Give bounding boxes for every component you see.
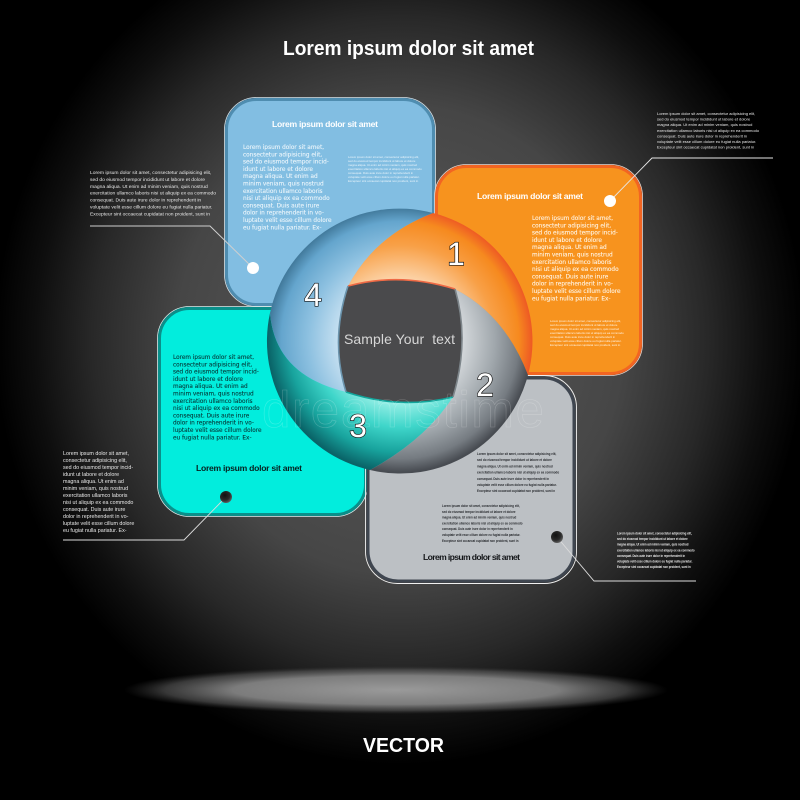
callout text: consequat. Duis aute irure dolor in reprehenderit in <box>657 133 747 138</box>
panel: orange card <box>434 164 642 376</box>
floor spotlight <box>124 666 668 714</box>
grey card upper text: magna aliqua. Ut enim ad minim veniam, quis nostrud <box>477 464 553 468</box>
blue card small text: exercitation ullamco laboris nisi ut aliquip ex ea commodo <box>348 167 422 171</box>
orange card body text: eu fugiat nulla pariatur. Ex- <box>532 296 611 302</box>
number 2: 2 <box>476 367 494 403</box>
orange card body text: consectetur adipisicing elit, <box>532 223 611 229</box>
orange card small text: Lorem ipsum dolor sit amet, consectetur adipisicing elit, <box>550 319 621 323</box>
grey card shape <box>366 376 576 584</box>
callout text: Lorem ipsum dolor sit amet, consectetur adipisicing elit, <box>657 111 755 116</box>
orange card body text: magna aliqua. Ut enim ad <box>532 245 607 251</box>
callout text: Lorem ipsum dolor sit amet, consectetur adipisicing elit, <box>90 170 211 176</box>
orange card body text: consequat. Duis aute irure <box>532 274 609 280</box>
teal card body text: luptate velit esse cillum dolore <box>173 428 262 434</box>
blue card body text: luptate velit esse cillum dolore <box>243 218 332 224</box>
blue card small text: sed do eiusmod tempor incididunt ut labore et dolore <box>348 159 416 163</box>
center panel right edge <box>453 289 462 397</box>
grey card upper text: exercitation ullamco laboris nisi ut aliquip ex ea commodo <box>477 470 559 475</box>
blue card small text: Excepteur sint occaecat cupidatat non proident, sunt in <box>348 179 419 183</box>
segmented ring diagram <box>267 209 532 474</box>
grey card lower text: Excepteur sint occaecat cupidatat non proident, sunt in <box>442 539 519 543</box>
footer label: VECTOR <box>363 735 445 757</box>
callout text: consequat. Duis aute irure <box>63 507 125 513</box>
leader line <box>610 158 773 201</box>
grey card upper text: voluptate velit esse cillum dolore eu fugiat nulla pariatur. <box>477 483 557 487</box>
callout text: Lorem ipsum dolor sit amet, consectetur adipisicing elit, <box>617 531 692 536</box>
callout text: eu fugiat nulla pariatur. Ex- <box>63 528 127 534</box>
center panel <box>338 280 462 402</box>
callout text: consequat. Duis aute irure dolor in reprehenderit in <box>90 198 201 204</box>
orange card body text: luptate velit esse cillum dolore <box>532 289 621 295</box>
watermark: dreamstime <box>262 381 544 438</box>
marker dot <box>247 262 259 274</box>
number 4: 4 <box>304 277 322 313</box>
grey card lower text: consequat. Duis aute irure dolor in reprehenderit in <box>442 527 513 531</box>
callout text: sed do eiusmod tempor incididunt ut labore et dolore <box>657 117 751 122</box>
blue card small text: magna aliqua. Ut enim ad minim veniam, quis nostrud <box>348 163 417 167</box>
orange card small text: magna aliqua. Ut enim ad minim veniam, quis nostrud <box>550 327 619 331</box>
callout text: Excepteur sint occaecat cupidatat non proident, sunt in <box>90 211 210 217</box>
blue card shape <box>224 98 436 306</box>
teal card body text: consequat. Duis aute irure <box>173 413 250 419</box>
blue card heading: Lorem ipsum dolor sit amet <box>272 119 378 129</box>
callout text: voluptate velit esse cillum dolore eu fugiat nulla pariatur. <box>657 139 756 144</box>
orange card body text: dolor in reprehenderit in vo- <box>532 282 613 288</box>
orange card shape <box>434 164 642 376</box>
blue card body text: nisi ut aliquip ex ea commodo <box>243 196 330 202</box>
callout text: sed do eiusmod tempor incididunt ut labore et dolore <box>617 537 688 541</box>
callout: orange card <box>604 111 773 207</box>
callout text: exercitation ullamco laboris nisi ut aliquip ex ea commodo <box>90 191 216 197</box>
grey card upper text: consequat. Duis aute irure dolor in reprehenderit in <box>477 477 549 481</box>
title: Lorem ipsum dolor sit amet <box>283 38 534 60</box>
blue card small text: Lorem ipsum dolor sit amet, consectetur adipisicing elit, <box>348 155 419 159</box>
callout text: exercitation ullamco laboris nisi ut aliquip ex ea commodo <box>617 548 695 552</box>
center label: Sample Your text <box>344 331 455 347</box>
callout text: voluptate velit esse cillum dolore eu fugiat nulla pariatur. <box>617 559 693 564</box>
panel: blue card <box>224 98 436 306</box>
callout text: magna aliqua. Ut enim ad minim veniam, quis nostrud <box>90 184 208 190</box>
marker dot <box>551 531 563 543</box>
center panel left edge <box>338 286 348 392</box>
orange card body text: sed do eiusmod tempor incid- <box>532 231 618 237</box>
orange card body text: exercitation ullamco laboris <box>532 260 612 266</box>
segment 1: orange <box>348 213 532 375</box>
callout: blue card <box>90 170 259 274</box>
teal card body text: idunt ut labore et dolore <box>173 377 243 383</box>
blue card body text: minim veniam, quis nostrud <box>243 182 324 188</box>
callout text: exercitation ullamco laboris <box>63 493 128 499</box>
grey card lower text: sed do eiusmod tempor incididunt ut labore et dolore <box>442 510 516 514</box>
leader line <box>90 226 253 268</box>
leader line <box>63 497 226 540</box>
orange card body text: minim veniam, quis nostrud <box>532 252 613 258</box>
callout text: sed do eiusmod tempor incididunt ut labore et dolore <box>90 177 205 183</box>
callout: teal card <box>63 451 232 540</box>
teal card body text: eu fugiat nulla pariatur. Ex- <box>173 435 252 441</box>
number 1: 1 <box>447 236 465 272</box>
callout text: nisi ut aliquip ex ea commodo <box>63 500 133 506</box>
blue card body text: exercitation ullamco laboris <box>243 189 323 195</box>
marker dot <box>604 195 616 207</box>
callout text: luptate velit esse cillum dolore <box>63 521 134 527</box>
callout text: dolor in reprehenderit in vo- <box>63 514 129 520</box>
blue card body text: eu fugiat nulla pariatur. Ex- <box>243 225 322 231</box>
blue card body text: magna aliqua. Ut enim ad <box>243 174 318 180</box>
panel: teal card <box>158 306 368 516</box>
segment 3: teal <box>267 313 453 470</box>
teal card body text: dolor in reprehenderit in vo- <box>173 421 254 427</box>
orange card small text: sed do eiusmod tempor incididunt ut labore et dolore <box>550 323 618 327</box>
blue card body text: dolor in reprehenderit in vo- <box>243 211 324 217</box>
grey card upper text: Excepteur sint occaecat cupidatat non proident, sunt in <box>477 489 555 493</box>
callout text: minim veniam, quis nostrud <box>63 486 128 492</box>
callout text: magna aliqua. Ut enim ad minim veniam, quis nostrud <box>617 542 689 547</box>
blue card body text: consectetur adipisicing elit, <box>243 152 322 158</box>
blue card body text: Lorem ipsum dolor sit amet, <box>243 145 324 151</box>
teal card body text: Lorem ipsum dolor sit amet, <box>173 355 254 361</box>
callout text: consequat. Duis aute irure dolor in reprehenderit in <box>617 554 685 558</box>
orange card small text: Excepteur sint occaecat cupidatat non proident, sunt in <box>550 343 621 347</box>
teal card body text: sed do eiusmod tempor incid- <box>173 370 259 376</box>
teal card body text: magna aliqua. Ut enim ad <box>173 384 248 390</box>
grey card lower text: Lorem ipsum dolor sit amet, consectetur adipisicing elit, <box>442 504 520 508</box>
blue card body text: consequat. Duis aute irure <box>243 203 320 209</box>
teal card body text: nisi ut aliquip ex ea commodo <box>173 406 260 412</box>
callout text: magna aliqua. Ut enim ad <box>63 479 124 485</box>
orange card body text: idunt ut labore et dolore <box>532 238 602 244</box>
callout text: Excepteur sint occaecat cupidatat non proident, sunt in <box>617 565 691 569</box>
center panel top edge <box>348 280 455 289</box>
callout text: idunt ut labore et dolore <box>63 472 119 478</box>
callout text: consectetur adipisicing elit, <box>63 458 127 464</box>
teal card body text: exercitation ullamco laboris <box>173 399 253 405</box>
orange card small text: voluptate velit esse cillum dolore eu fugiat nulla pariatur. <box>550 339 622 343</box>
blue card small text: consequat. Duis aute irure dolor in reprehenderit in <box>348 171 413 175</box>
grey card heading: Lorem ipsum dolor sit amet <box>423 552 520 562</box>
grey card upper text: sed do eiusmod tempor incididunt ut labore et dolore <box>477 458 552 462</box>
center panel bottom edge <box>346 392 453 402</box>
leader line <box>557 537 696 581</box>
callout text: sed do eiusmod tempor incid- <box>63 465 133 471</box>
callout text: Lorem ipsum dolor sit amet, <box>63 451 129 457</box>
teal card heading: Lorem ipsum dolor sit amet <box>196 463 302 473</box>
blue card body text: idunt ut labore et dolore <box>243 167 313 173</box>
panel: grey card <box>366 376 576 584</box>
number 3: 3 <box>349 408 367 444</box>
orange card small text: consequat. Duis aute irure dolor in reprehenderit in <box>550 335 615 339</box>
orange card small text: exercitation ullamco laboris nisi ut aliquip ex ea commodo <box>550 331 624 335</box>
callout text: magna aliqua. Ut enim ad minim veniam, quis nostrud <box>657 122 752 127</box>
teal card body text: minim veniam, quis nostrud <box>173 392 254 398</box>
teal card body text: consectetur adipisicing elit, <box>173 362 252 368</box>
blue card body text: sed do eiusmod tempor incid- <box>243 160 329 166</box>
orange card body text: nisi ut aliquip ex ea commodo <box>532 267 619 273</box>
grey card lower text: magna aliqua. Ut enim ad minim veniam, quis nostrud <box>442 515 516 520</box>
callout text: Excepteur sint occaecat cupidatat non proident, sunt in <box>657 145 754 150</box>
segment 4: blue <box>270 209 433 392</box>
orange card heading: Lorem ipsum dolor sit amet <box>477 191 583 201</box>
grey card lower text: voluptate velit esse cillum dolore eu fugiat nulla pariatur. <box>442 533 520 537</box>
grey card upper text: Lorem ipsum dolor sit amet, consectetur adipisicing elit, <box>477 452 556 456</box>
marker dot <box>220 491 232 503</box>
callout text: exercitation ullamco laboris nisi ut aliquip ex ea commodo <box>657 128 760 133</box>
callout text: voluptate velit esse cillum dolore eu fugiat nulla pariatur. <box>90 204 212 210</box>
blue card small text: voluptate velit esse cillum dolore eu fugiat nulla pariatur. <box>348 175 420 179</box>
segment 2: grey <box>370 289 528 474</box>
orange card body text: Lorem ipsum dolor sit amet, <box>532 216 613 222</box>
callout: grey card <box>551 531 696 581</box>
grey card lower text: exercitation ullamco laboris nisi ut aliquip ex ea commodo <box>442 521 523 525</box>
teal card shape <box>158 306 368 516</box>
